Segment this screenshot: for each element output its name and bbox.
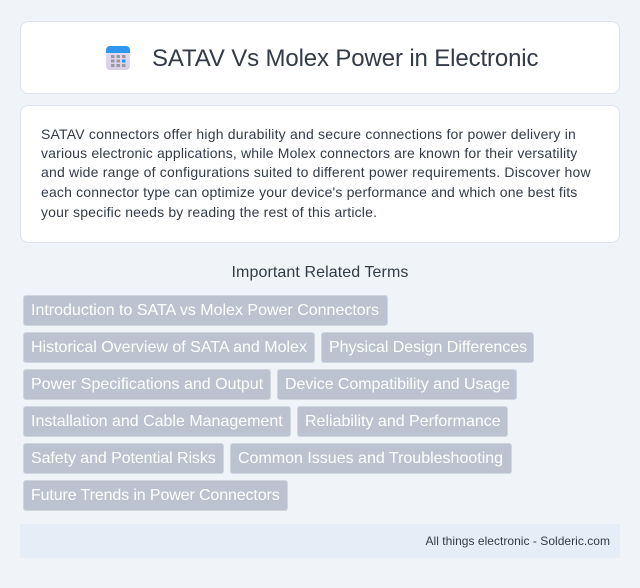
- description text: your specific needs by reading the rest of this article.: [41, 204, 377, 220]
- description text: and wide range of configurations suited to different power requirements. Discover how: [41, 164, 591, 180]
- tag: [321, 332, 534, 363]
- tag: [297, 406, 508, 437]
- description text: [41, 126, 591, 220]
- header panel: [20, 21, 620, 94]
- title: SATAV Vs Molex Power in Electronic: [152, 45, 538, 72]
- footer text: All things electronic - Solderic.com: [426, 534, 610, 548]
- tag: [230, 443, 512, 474]
- tag: [23, 369, 271, 400]
- description text: various electronic applications, while Molex connectors are known for their versatility: [41, 145, 577, 161]
- tag: Introduction to SATA vs Molex Power Connectors: [31, 302, 379, 319]
- related terms tags: [23, 295, 534, 511]
- tag: Common Issues and Troubleshooting: [238, 450, 503, 467]
- tag: Future Trends in Power Connectors: [31, 487, 280, 504]
- tag: [23, 332, 315, 363]
- tag: Safety and Potential Risks: [31, 450, 216, 467]
- tag: [277, 369, 517, 400]
- tag: Physical Design Differences: [329, 339, 527, 356]
- icon: calendar: [106, 46, 130, 70]
- tag: [23, 295, 388, 326]
- tag: Reliability and Performance: [305, 413, 501, 430]
- tag: [23, 443, 224, 474]
- description text: SATAV connectors offer high durability and secure connections for power delivery in: [41, 126, 576, 142]
- tag: Installation and Cable Management: [31, 413, 283, 430]
- tag: Historical Overview of SATA and Molex: [31, 339, 307, 356]
- description panel: [20, 105, 620, 243]
- tag: [23, 480, 288, 511]
- tag: [23, 406, 291, 437]
- footer bar: [20, 524, 620, 558]
- tag: Power Specifications and Output: [31, 376, 263, 393]
- section heading: Important Related Terms: [232, 264, 408, 281]
- description text: each connector type can optimize your device's performance and which one best fits: [41, 184, 577, 200]
- tag: Device Compatibility and Usage: [285, 376, 510, 393]
